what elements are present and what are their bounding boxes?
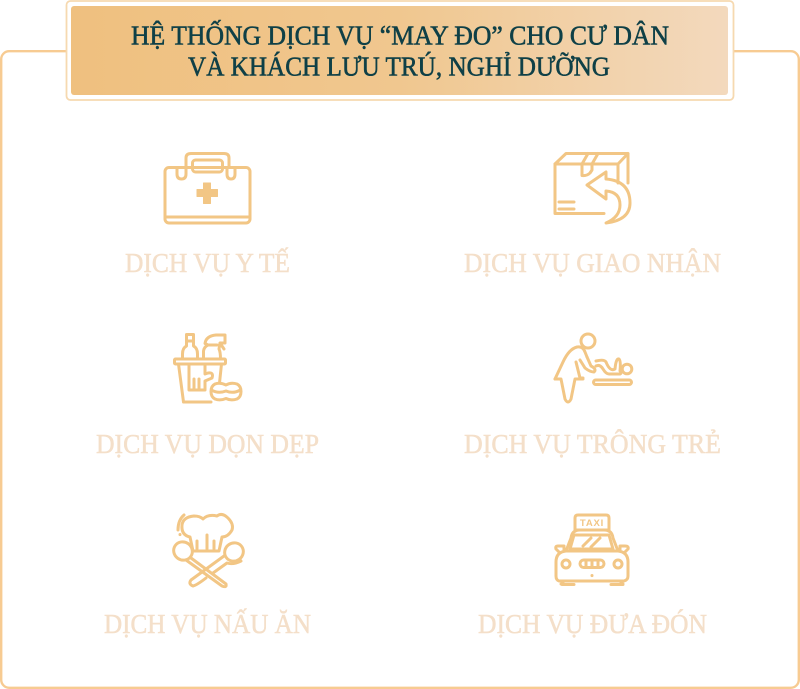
header banner (66, 1, 734, 100)
icon: cleaning supplies (174, 334, 241, 402)
label: cooking service: DỊCH VỤ NẤU ĂN (104, 608, 311, 639)
icon: medical case (165, 154, 250, 223)
title: VÀ KHÁCH LƯU TRÚ, NGHỈ DƯỠNG (188, 50, 610, 82)
icon: delivery box (555, 154, 630, 223)
icon: chef hat and spoons (170, 514, 247, 587)
icon: childcare (555, 334, 632, 402)
icon: taxi (556, 515, 628, 584)
title (131, 20, 669, 82)
label: delivery service: DỊCH VỤ GIAO NHẬN (464, 247, 721, 278)
label: cleaning service: DỊCH VỤ DỌN DẸP (96, 428, 319, 459)
label: medical service: DỊCH VỤ Y TẾ (125, 247, 290, 278)
text: taxi sign: TAXI (580, 518, 604, 529)
label: shuttle service: DỊCH VỤ ĐƯA ĐÓN (478, 608, 707, 639)
title: HỆ THỐNG DỊCH VỤ “MAY ĐO” CHO CƯ DÂN (131, 20, 669, 50)
label: babysitting service: DỊCH VỤ TRÔNG TRẺ (464, 428, 721, 459)
